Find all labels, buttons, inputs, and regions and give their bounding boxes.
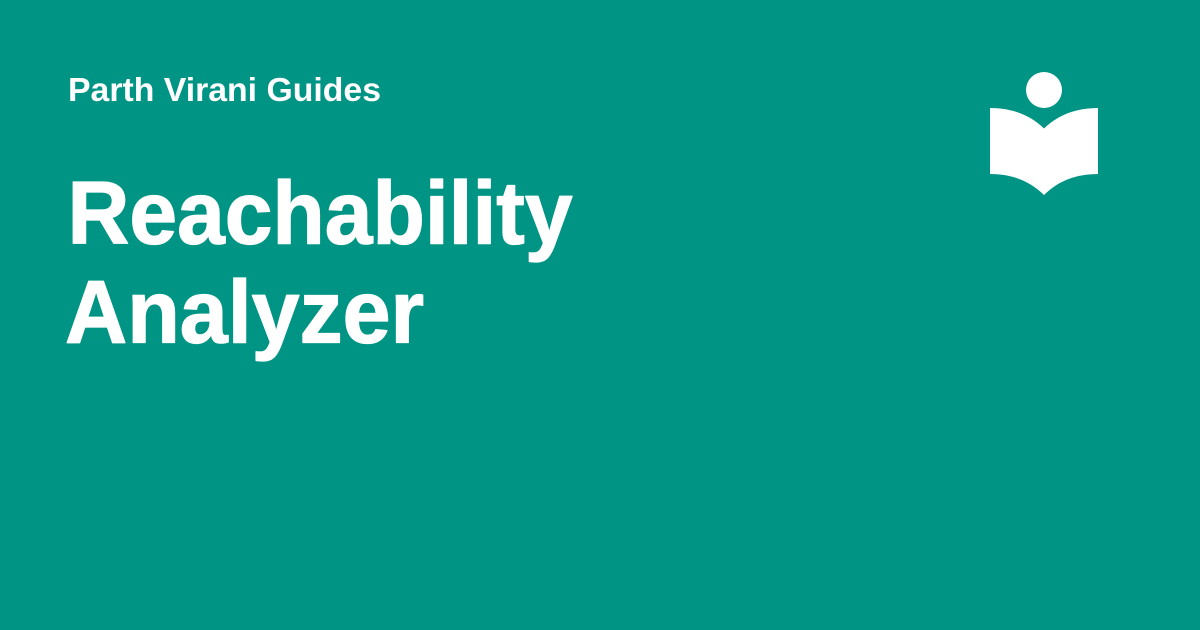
icon: open book with reader <box>990 72 1098 195</box>
site name: Parth Virani Guides <box>68 72 381 109</box>
title <box>65 162 573 362</box>
title: Analyzer <box>65 262 424 362</box>
title: Reachability <box>68 162 573 262</box>
